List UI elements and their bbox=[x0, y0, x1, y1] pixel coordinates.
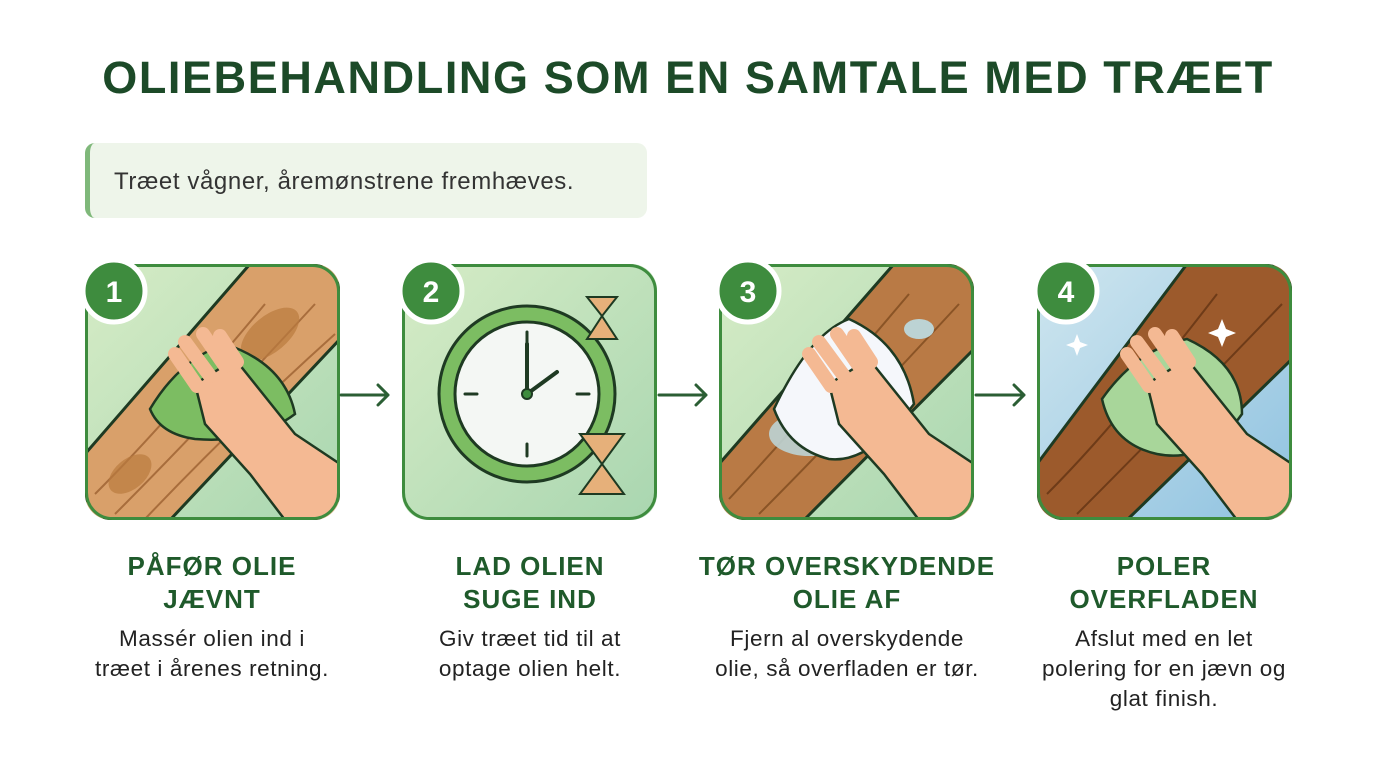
step 4 text: polering for en jævn og bbox=[1042, 656, 1286, 681]
cloth bbox=[150, 344, 295, 440]
title: OLIEBEHANDLING SOM EN SAMTALE MED TRÆET bbox=[102, 52, 1274, 103]
step 3 text: OLIE AF bbox=[793, 584, 901, 614]
number badges: 4 bbox=[1058, 276, 1075, 309]
step 2 text: LAD OLIEN bbox=[455, 551, 605, 581]
step 1 text: PÅFØR OLIE bbox=[128, 551, 296, 581]
panel 1 bbox=[85, 264, 340, 520]
number badges: 2 bbox=[423, 276, 439, 309]
step 2 text: SUGE IND bbox=[463, 584, 597, 614]
number badges bbox=[83, 260, 1097, 322]
step 1 text bbox=[95, 551, 329, 681]
clock icon bbox=[439, 306, 615, 482]
step 4 text: POLER bbox=[1117, 551, 1211, 581]
step 2 text: optage olien helt. bbox=[439, 656, 621, 681]
step 1 text: træet i årenes retning. bbox=[95, 656, 329, 681]
number badges: 1 bbox=[106, 276, 122, 309]
panel 3 bbox=[719, 264, 974, 520]
step 2 text: Giv træet tid til at bbox=[439, 626, 621, 651]
step 2 text bbox=[439, 551, 621, 681]
step 4 text: glat finish. bbox=[1110, 686, 1218, 711]
panel 4 bbox=[1037, 264, 1292, 520]
step 1 text: Massér olien ind i bbox=[119, 626, 305, 651]
number badges: 3 bbox=[740, 276, 756, 309]
step 4 text bbox=[1042, 551, 1286, 711]
callout bbox=[85, 143, 647, 218]
hourglass icons bbox=[580, 297, 624, 494]
step 4 text: Afslut med en let bbox=[1075, 626, 1253, 651]
step 4 text: OVERFLADEN bbox=[1069, 584, 1259, 614]
hand bbox=[175, 334, 340, 520]
step 3 text: Fjern al overskydende bbox=[730, 626, 964, 651]
arrows bbox=[341, 385, 1024, 405]
step 3 text bbox=[699, 551, 995, 681]
panel 2 bbox=[402, 264, 657, 520]
step 3 text: olie, så overfladen er tør. bbox=[715, 656, 979, 681]
callout: Træet vågner, åremønstrene fremhæves. bbox=[114, 168, 574, 195]
step 1 text: JÆVNT bbox=[163, 584, 261, 614]
wood plank bbox=[85, 264, 340, 520]
step 3 text: TØR OVERSKYDENDE bbox=[699, 551, 995, 581]
